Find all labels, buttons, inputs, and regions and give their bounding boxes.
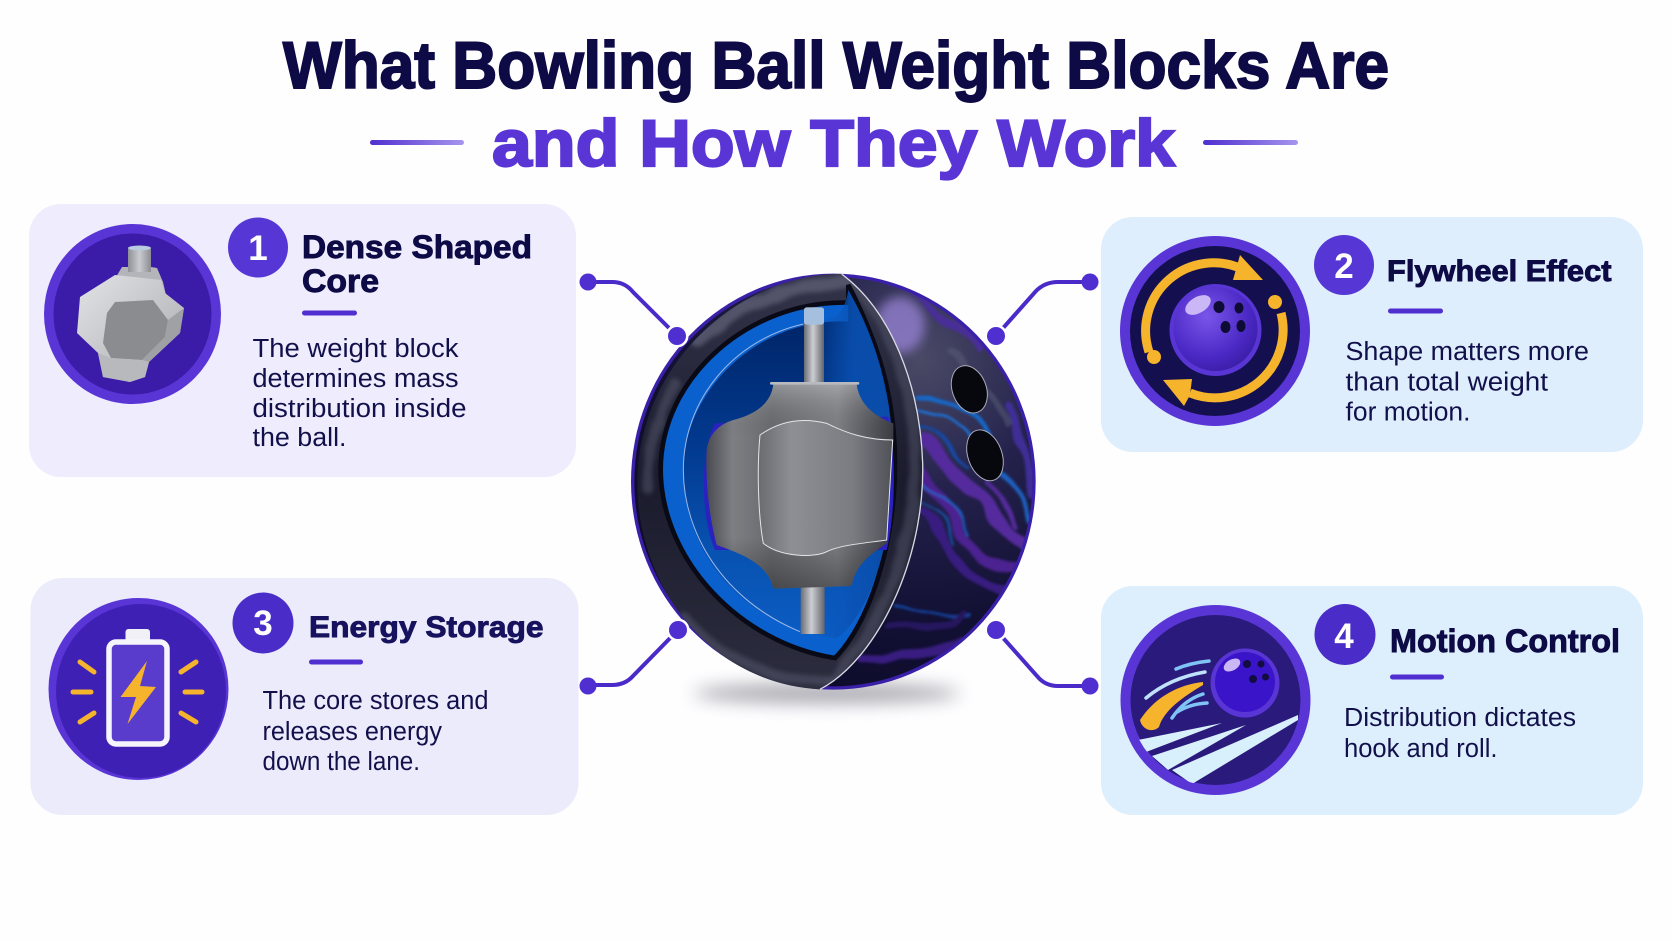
- body text: for motion.: [1346, 398, 1470, 426]
- cut edge highlight: [820, 274, 923, 689]
- body text: hook and roll.: [1344, 735, 1498, 763]
- right blue wedge: [813, 290, 893, 638]
- body text: The core stores and: [262, 687, 488, 715]
- body text: [252, 335, 466, 452]
- heading: Core: [302, 263, 379, 299]
- icon: spinning ball: [1120, 236, 1310, 426]
- infographic: [29, 39, 1643, 815]
- icon: rolling ball: [1120, 605, 1310, 795]
- heading: Flywheel Effect: [1387, 255, 1612, 288]
- title line 2: and How They Work: [492, 106, 1175, 180]
- body text: Distribution dictates: [1344, 704, 1576, 732]
- number badge 1: 1: [248, 229, 268, 268]
- connector: card 2 to ball: [987, 274, 1098, 345]
- finger holes: [945, 361, 1010, 486]
- body text: down the lane.: [262, 748, 420, 776]
- bottom stem: [801, 587, 825, 634]
- heading: [302, 229, 532, 299]
- number badge 3: 3: [253, 604, 273, 643]
- panel: dense shaped core: [29, 204, 576, 477]
- panel: flywheel effect: [1101, 217, 1643, 452]
- body text: the ball.: [252, 424, 346, 452]
- ball outer rim: [631, 274, 1036, 690]
- heading: Energy Storage: [309, 611, 544, 644]
- panel: motion control: [1101, 586, 1643, 815]
- body text: [1346, 338, 1589, 426]
- central bowling ball cutaway: [631, 274, 1036, 703]
- connector: card 3 to ball: [580, 621, 687, 694]
- icon: battery: [48, 598, 228, 780]
- blue inner layer: [661, 285, 895, 658]
- shell sheen: [648, 283, 915, 680]
- panel: energy storage: [30, 578, 578, 815]
- connector: card 1 to ball: [580, 274, 686, 345]
- number badge 4: [1314, 604, 1376, 665]
- title line 1: What Bowling Ball Weight Blocks Are: [283, 28, 1389, 102]
- heading rule: [1388, 308, 1443, 314]
- body text: determines mass: [252, 365, 458, 393]
- title: [283, 28, 1389, 180]
- ball marble shell: [634, 277, 1032, 686]
- cavity highlight line: [683, 324, 803, 632]
- heading rule: [309, 660, 363, 664]
- weight block core: [706, 382, 893, 589]
- ground shadow: [693, 683, 960, 703]
- inner cavity: [683, 290, 893, 638]
- top stem: [804, 307, 824, 386]
- heading rule: [1390, 674, 1444, 680]
- number badge 1: [228, 218, 288, 278]
- heading rule: [302, 310, 357, 316]
- number badge 2: [1314, 235, 1374, 295]
- number badge 3: [232, 592, 294, 654]
- marble swirls: [860, 290, 1030, 662]
- body text: The weight block: [252, 335, 459, 363]
- body text: Shape matters more: [1346, 338, 1589, 366]
- body text: releases energy: [262, 718, 442, 746]
- core halo: [704, 417, 894, 550]
- cut shell: [637, 274, 923, 689]
- heading: Dense Shaped: [302, 229, 532, 265]
- heading: Motion Control: [1390, 623, 1620, 659]
- body text: [262, 687, 488, 776]
- icon: weight block: [44, 224, 221, 404]
- body text: [1344, 704, 1576, 763]
- connector: card 4 to ball: [987, 621, 1098, 694]
- number badge 4: 4: [1334, 617, 1354, 656]
- title accent rules: [370, 140, 1298, 145]
- number badge 2: 2: [1334, 247, 1354, 286]
- body text: than total weight: [1346, 368, 1548, 396]
- body text: distribution inside: [252, 395, 466, 423]
